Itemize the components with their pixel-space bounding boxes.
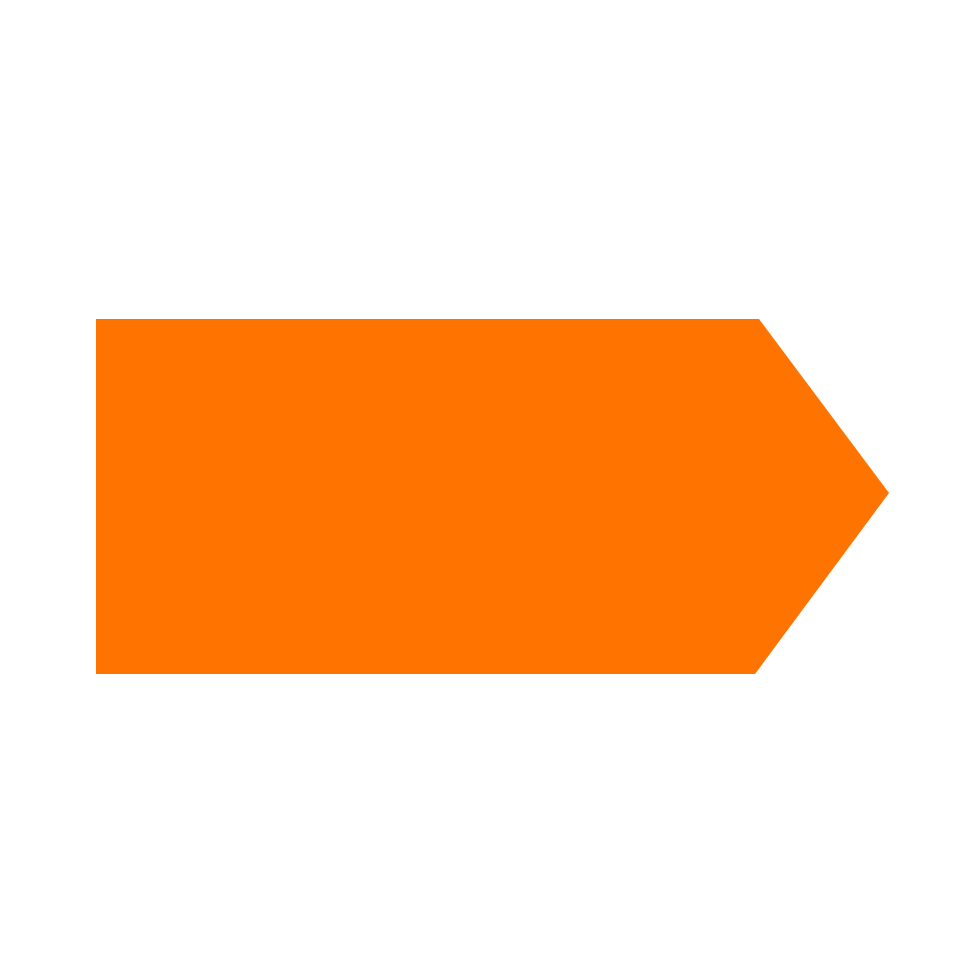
arrow: orange pentagon pointing right: [96, 319, 889, 674]
